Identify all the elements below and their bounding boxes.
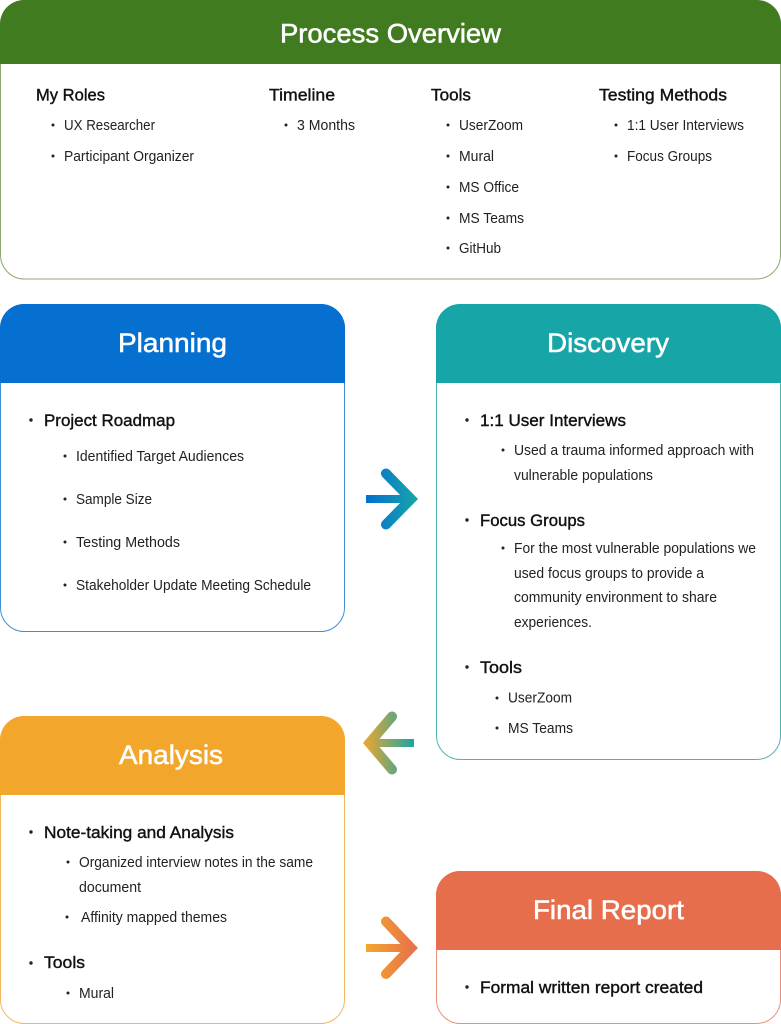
heading: discovery: Discovery — [547, 328, 670, 358]
list: discovery tools: UserZoom — [508, 690, 572, 706]
panel: final report — [436, 871, 781, 1024]
list: user interviews: Used a trauma informed approach with — [514, 443, 754, 459]
column: timeline: 3 Months — [297, 118, 355, 134]
header band: planning — [0, 304, 345, 383]
list: focus groups: experiences. — [514, 615, 592, 631]
column: tools: GitHub — [459, 241, 501, 257]
list: analysis tools: Mural — [79, 986, 114, 1002]
list: user interviews: vulnerable populations — [514, 468, 653, 484]
header band: analysis — [0, 716, 345, 795]
list: final report: Formal written report created — [480, 978, 703, 997]
column: tools: MS Office — [459, 180, 519, 196]
list: note-taking: Organized interview notes in the same — [79, 855, 313, 871]
column: testing methods: Focus Groups — [627, 149, 712, 165]
heading: planning: Planning — [118, 328, 227, 358]
arrow: analysis to final report — [366, 922, 411, 974]
column: tools: Mural — [459, 149, 494, 165]
column: testing methods — [599, 86, 744, 165]
panel: analysis — [0, 716, 345, 1024]
list: note-taking: Note-taking and Analysis — [44, 823, 234, 842]
column: testing methods: 1:1 User Interviews — [627, 118, 744, 134]
column: my roles: My Roles — [36, 86, 105, 104]
list: note-taking — [29, 823, 313, 926]
heading: final report: Final Report — [533, 895, 684, 925]
list: discovery tools: Tools — [480, 658, 522, 677]
list: user interviews — [465, 411, 754, 484]
column: tools: UserZoom — [459, 118, 523, 134]
column: my roles: Participant Organizer — [64, 149, 194, 165]
column: timeline: Timeline — [269, 86, 335, 104]
list: focus groups — [465, 511, 756, 631]
list: focus groups: used focus groups to provide a — [514, 566, 705, 582]
list: project roadmap: Identified Target Audiences — [76, 449, 244, 465]
column: testing methods: Testing Methods — [599, 86, 727, 104]
list: discovery tools: MS Teams — [508, 721, 573, 737]
list: project roadmap: Project Roadmap — [44, 411, 175, 430]
header band: discovery — [436, 304, 781, 383]
list: note-taking: Affinity mapped themes — [81, 910, 227, 926]
heading: analysis: Analysis — [119, 740, 223, 770]
column: tools — [431, 86, 524, 257]
list: analysis tools: Tools — [44, 953, 85, 972]
title: Process Overview — [280, 18, 502, 48]
list: discovery tools — [465, 658, 573, 737]
list: focus groups: For the most vulnerable populations we — [514, 541, 756, 557]
arrow: planning to discovery — [366, 474, 411, 524]
column: my roles — [36, 86, 194, 165]
list: project roadmap: Testing Methods — [76, 535, 180, 551]
column: tools: Tools — [431, 86, 471, 104]
list: focus groups: Focus Groups — [480, 511, 585, 530]
list: user interviews: 1:1 User Interviews — [480, 411, 626, 430]
header band: process overview — [0, 0, 781, 64]
panel: discovery — [436, 304, 781, 760]
list: focus groups: community environment to share — [514, 590, 717, 606]
list: project roadmap — [29, 411, 311, 594]
list: project roadmap: Stakeholder Update Meeting Schedule — [76, 578, 311, 594]
panel: planning — [0, 304, 345, 632]
panel: process overview — [0, 0, 781, 279]
list: project roadmap: Sample Size — [76, 492, 152, 508]
column: tools: MS Teams — [459, 211, 524, 227]
list: analysis tools — [29, 953, 114, 1002]
column: timeline — [269, 86, 355, 134]
header band: final report — [436, 871, 781, 950]
column: my roles: UX Researcher — [64, 118, 155, 134]
arrow: discovery to analysis — [370, 716, 414, 770]
list: note-taking: document — [79, 880, 141, 896]
